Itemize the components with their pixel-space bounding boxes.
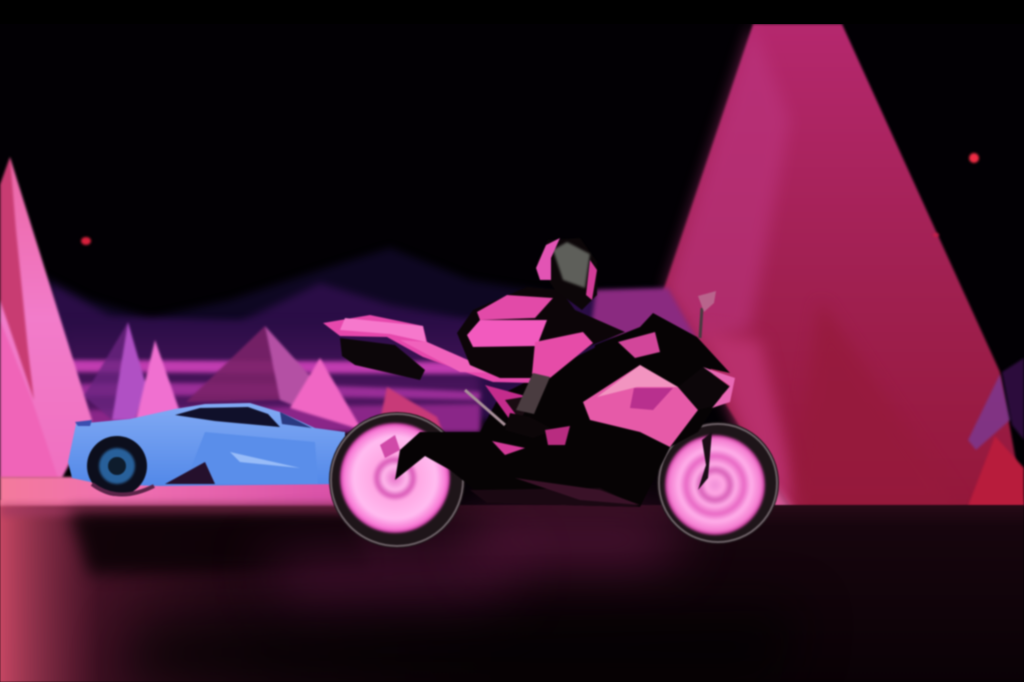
light streaks xyxy=(60,322,480,432)
car body xyxy=(68,403,345,486)
side facets far right xyxy=(968,358,1024,506)
front wheel xyxy=(657,422,779,544)
rider lower leg xyxy=(516,373,550,414)
floor xyxy=(0,505,1024,682)
car window xyxy=(175,407,280,427)
engine highlights xyxy=(492,426,640,505)
blue car xyxy=(68,403,345,496)
fairing xyxy=(583,365,698,447)
spoiler xyxy=(75,420,92,426)
top black band xyxy=(0,0,1024,24)
exhaust xyxy=(340,338,425,380)
helmet xyxy=(536,238,597,310)
dark wedge xyxy=(165,462,215,484)
rear wheel xyxy=(329,412,465,548)
motorcycle xyxy=(323,238,779,548)
big pyramid right xyxy=(590,24,1024,512)
windscreen xyxy=(590,313,730,387)
rider sleeve xyxy=(467,320,547,347)
rider hand xyxy=(618,332,660,358)
bike frame dark xyxy=(395,330,722,507)
headlight xyxy=(678,367,730,410)
red particles xyxy=(81,153,979,245)
car rear wheel xyxy=(87,436,154,496)
tail strut xyxy=(465,390,505,425)
mirror xyxy=(698,291,716,338)
tail xyxy=(323,315,537,383)
rider torso dark xyxy=(457,287,625,378)
translucent pyramids xyxy=(84,322,128,420)
floor reflections xyxy=(70,512,800,682)
pyramids left xyxy=(0,157,446,478)
distant purple hills xyxy=(40,248,700,420)
tall pyramid xyxy=(0,157,92,478)
rider upper arm xyxy=(477,295,553,320)
boot xyxy=(505,413,554,438)
rider thigh xyxy=(532,332,593,378)
